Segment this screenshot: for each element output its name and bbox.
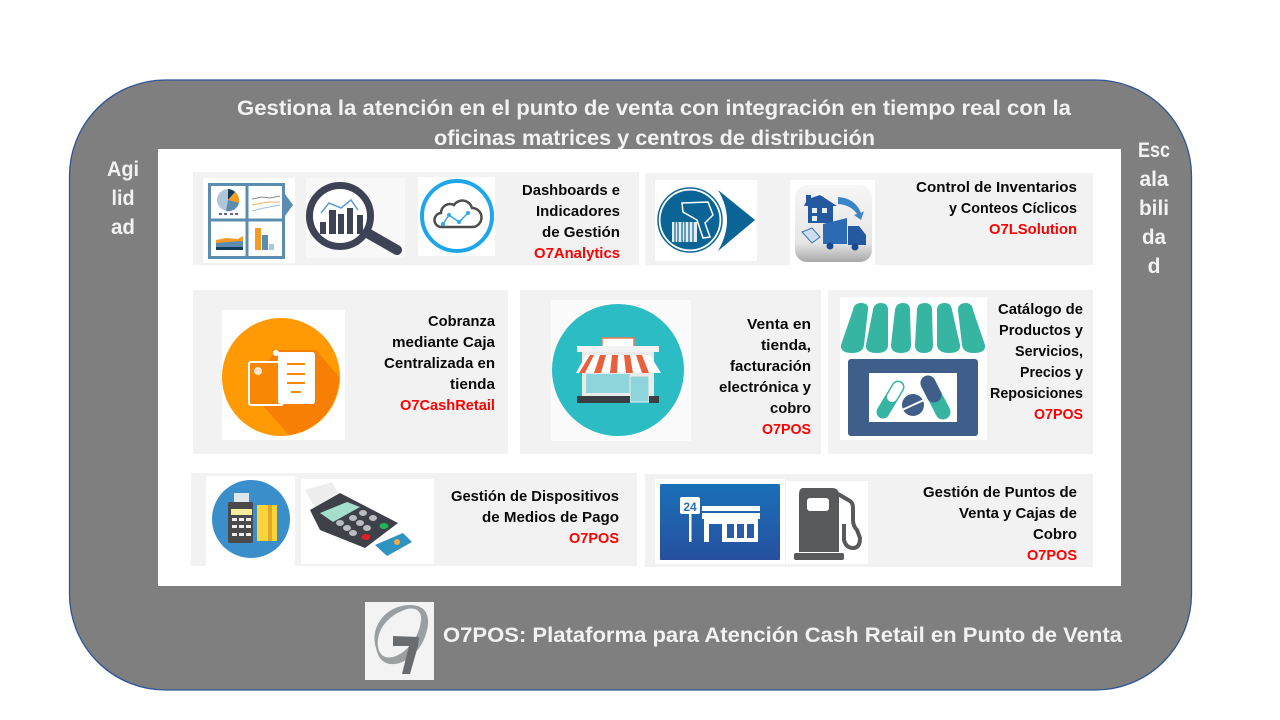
text: dispositivos: Gestión de Dispositivos (451, 488, 619, 505)
text: catalogo: Servicios, (1015, 343, 1083, 360)
icon: orange card and receipt (222, 310, 345, 440)
icon: teal storefront (551, 300, 691, 441)
right label: Escalabilidad: Esc (1138, 139, 1170, 162)
text: cobranza: Cobranza (428, 313, 496, 330)
left label: Agilidad (107, 158, 139, 239)
text: venta: electrónica y (719, 379, 812, 396)
icon: pharmacy shop (840, 297, 987, 440)
left label: Agilidad: Agi (107, 158, 139, 181)
text: catalogo: Reposiciones (990, 385, 1083, 402)
text: puntos de venta: Venta y Cajas de (959, 505, 1077, 522)
icon: blue cash register (206, 476, 295, 566)
panel: dispositivos de pago (191, 473, 637, 566)
right label: Escalabilidad: d (1148, 255, 1160, 278)
panel: dashboards (193, 172, 639, 265)
white content area (158, 149, 1121, 586)
right label: Escalabilidad (1138, 139, 1170, 278)
text: venta (719, 316, 812, 438)
text: catalogo (990, 301, 1084, 423)
text: dispositivos: de Medios de Pago (482, 509, 619, 526)
text: puntos de venta: Cobro (1033, 526, 1077, 543)
panel: inventarios (645, 173, 1093, 265)
icon: barcode scanner (655, 180, 757, 261)
icon: 24h store: 24 (683, 500, 697, 514)
text: dispositivos (451, 488, 619, 547)
right label: Escalabilidad: ala (1140, 168, 1169, 191)
text: dashboards: O7Analytics (534, 245, 620, 262)
right label: Escalabilidad: bili (1139, 197, 1169, 220)
title: oficinas matrices y centros de distribución (434, 127, 875, 150)
panel: venta en tienda (520, 290, 821, 454)
icon: fuel pump (786, 481, 868, 564)
text: inventarios: Control de Inventarios (916, 179, 1077, 196)
text: puntos de venta: O7POS (1027, 547, 1077, 564)
logo: O7 (365, 602, 434, 680)
text: cobranza (384, 313, 496, 414)
text: puntos de venta (923, 484, 1077, 564)
text: cobranza: tienda (450, 376, 496, 393)
icon: dashboard grid (203, 178, 295, 263)
text: venta: cobro (770, 400, 811, 417)
text: venta: tienda, (761, 337, 811, 354)
text: dispositivos: O7POS (569, 530, 619, 547)
title (237, 97, 1071, 150)
text: catalogo: Productos y (999, 322, 1084, 339)
text: venta: O7POS (762, 421, 811, 438)
text: venta: facturación (730, 358, 811, 375)
text: inventarios: y Conteos Cíclicos (949, 200, 1077, 217)
text: catalogo: Precios y (1020, 364, 1084, 381)
text: dashboards (522, 182, 620, 262)
icon: 24h store (655, 479, 785, 564)
icon: magnifier chart (306, 178, 405, 258)
text: dashboards: Dashboards e (522, 182, 620, 199)
text: cobranza: Centralizada en (384, 355, 495, 372)
left label: Agilidad: lid (112, 187, 134, 210)
panel: cobranza (193, 290, 508, 454)
title: Gestiona la atención en el punto de venta con integración en tiempo real con la (237, 97, 1071, 120)
text: cobranza: O7CashRetail (400, 397, 495, 414)
icon: cloud chart (418, 177, 495, 256)
panel: puntos de venta (645, 474, 1093, 567)
text: dashboards: de Gestión (542, 224, 620, 241)
right label: Escalabilidad: da (1142, 226, 1166, 249)
left label: Agilidad: ad (111, 216, 135, 239)
text: venta: Venta en (747, 316, 811, 333)
text: catalogo: O7POS (1034, 406, 1083, 423)
text: cobranza: mediante Caja (392, 334, 496, 351)
icon: house and truck tile (790, 180, 875, 265)
text: inventarios (916, 179, 1077, 238)
footer heading: O7POS: Plataforma para Atención Cash Retail en Punto de Venta (443, 624, 1122, 647)
text: puntos de venta: Gestión de Puntos de (923, 484, 1077, 501)
panel: catalogo (828, 290, 1093, 454)
text: dashboards: Indicadores (536, 203, 620, 220)
text: inventarios: O7LSolution (989, 221, 1077, 238)
text: catalogo: Catálogo de (998, 301, 1083, 318)
main rounded panel (70, 80, 1192, 690)
icon: card terminal (301, 479, 434, 564)
